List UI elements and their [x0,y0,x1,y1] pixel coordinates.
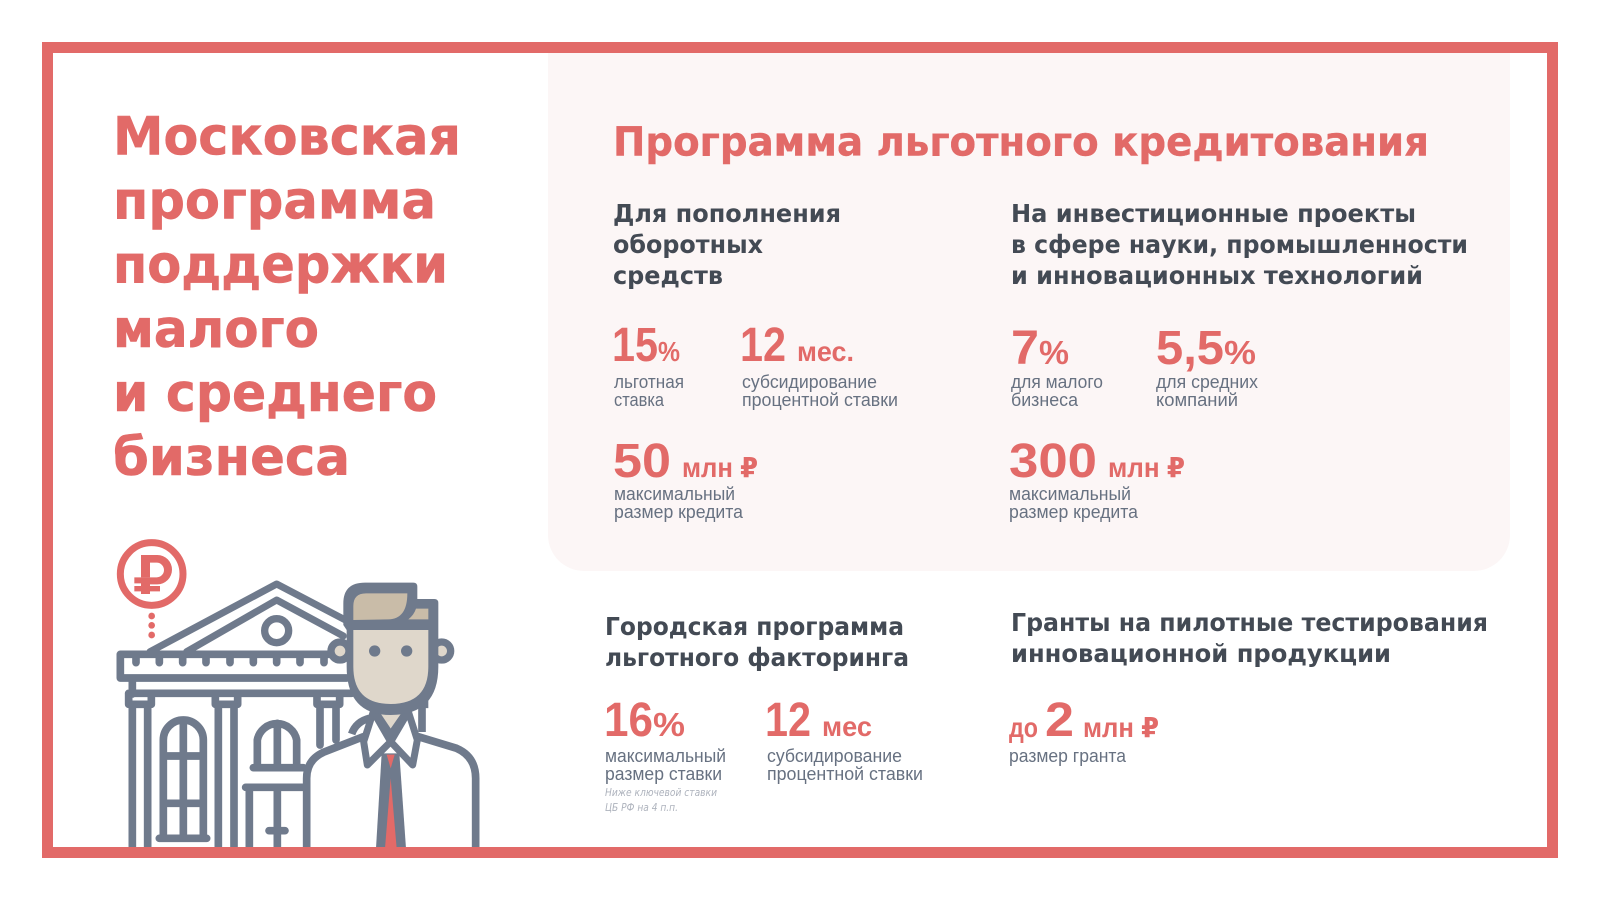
stat: 300 million rubles: млн ₽ [1108,452,1185,483]
title: Московская [113,106,461,168]
stat: 5.5%: % [1224,334,1256,371]
stat: 12 months [740,319,898,410]
subheading [1011,608,1488,668]
subheading: На инвестиционные проекты [1011,199,1416,228]
stat: 12 months [765,694,923,784]
stat: 12 months: мес [822,711,872,742]
stat: 12 months: 12 [740,319,786,372]
title: поддержки [113,234,448,296]
stat: 50 million rubles [613,435,758,522]
title: программа [113,170,436,232]
stat: 300 million rubles: максимальный [1009,484,1131,504]
stat: 16%: максимальный [605,746,726,766]
stat: 300 million rubles [1009,435,1185,522]
stat: 15%: % [658,336,680,367]
stat: 5.5%: 5,5 [1156,322,1224,375]
icon: businessman [307,583,476,848]
stat: 16%: % [653,706,685,743]
head [343,583,438,715]
stat: 50 million rubles: млн ₽ [682,452,758,483]
stat: up to 2 million rubles: размер гранта [1009,746,1127,766]
neck [378,713,403,736]
subheading [613,199,841,290]
stat: 12 months: процентной ставки [742,390,898,410]
icon: ruble coin [120,543,183,638]
stat: 300 million rubles: размер кредита [1009,502,1139,522]
stat: up to 2 million rubles [1009,694,1159,766]
section: factoring [604,612,923,814]
heading: credit program: Программа льготного кредитования [613,120,1429,166]
panel: credit program background [548,53,1510,571]
title: малого [113,299,319,360]
subheading: и инновационных технологий [1011,261,1423,290]
stat: 5.5%: компаний [1156,390,1238,410]
tie [376,753,406,848]
stat: 12 months: 12 [765,694,811,747]
stat: 5.5%: для средних [1156,372,1258,392]
stat: 12 months: процентной ставки [767,764,923,784]
stat: 300 million rubles: 300 [1009,435,1097,488]
stat: 7%: для малого [1011,372,1103,392]
stat: 16%: ЦБ РФ на 4 п.п. [605,801,678,814]
stat: up to 2 million rubles: 2 [1045,694,1074,747]
icon: bank building [120,584,352,847]
section: investment projects [1009,199,1468,522]
stat: 15%: 15 [612,319,658,372]
stat: 16%: 16 [604,694,653,747]
subheading: в сфере науки, промышленности [1011,230,1468,259]
subheading: Гранты на пилотные тестирования [1011,608,1488,637]
subheading [1011,199,1468,290]
ears [331,642,451,660]
section: working capital [612,199,898,522]
subheading: оборотных [613,230,763,259]
stat: 16%: размер ставки [605,764,722,784]
stat: 15%: льготная [614,372,684,392]
stat: 12 months: мес. [797,336,854,367]
stat: up to 2 million rubles: млн ₽ [1083,712,1159,743]
stat: 15% [612,319,684,410]
stat: 50 million rubles: 50 [613,435,671,488]
subheading: средств [613,261,723,290]
stat: 50 million rubles: максимальный [614,484,735,504]
section: grants [1009,608,1488,766]
stat: 50 million rubles: размер кредита [614,502,744,522]
stat: up to 2 million rubles: до [1009,712,1038,743]
shoulder and column detail [352,704,428,734]
subheading: Городская программа [605,612,904,641]
hair [353,593,407,620]
icon: bank and businessman [120,543,476,848]
jacket [307,737,476,848]
stat: 12 months: субсидирование [742,372,877,392]
stat: 16%: Ниже ключевой ставки [605,786,717,799]
stat: 7%: 7 [1011,322,1039,375]
subheading: Для пополнения [613,199,841,228]
stat: 7%: % [1039,334,1069,371]
collar [364,712,417,765]
stat: 7% [1011,322,1103,410]
stat: 15%: ставка [614,390,665,410]
stat: 7%: бизнеса [1011,390,1079,410]
subheading: инновационной продукции [1011,639,1391,668]
title [113,106,461,488]
title: и среднего [113,363,437,424]
stat: 12 months: субсидирование [767,746,902,766]
subheading [605,612,909,672]
subheading: льготного факторинга [605,643,909,672]
stat: 16% [604,694,726,814]
stat: 5.5% [1156,322,1258,410]
title: бизнеса [113,427,350,488]
